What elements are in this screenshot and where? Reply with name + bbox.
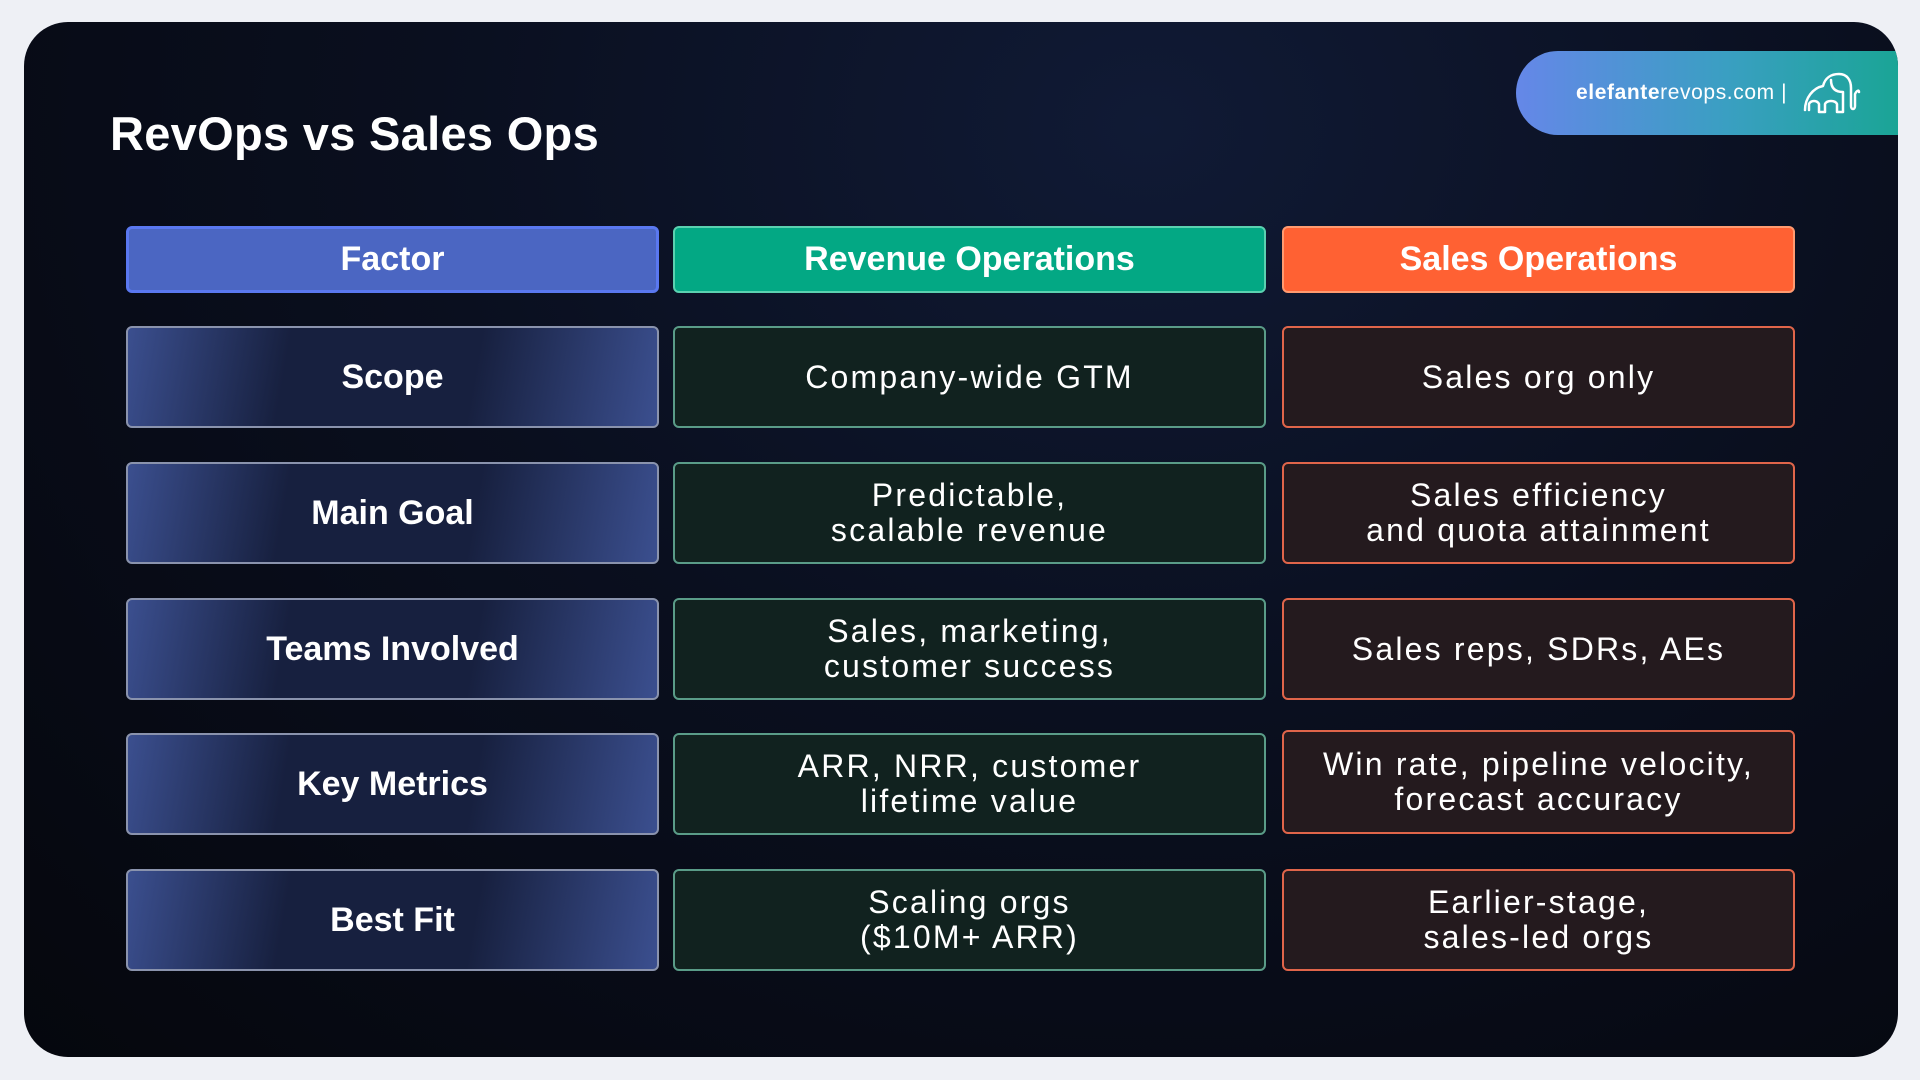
header: Revenue Operations: Revenue Operations <box>804 240 1135 278</box>
revops: scope <box>673 326 1266 428</box>
revops: teams: customer success <box>824 648 1115 684</box>
row: Key Metrics: Key Metrics <box>297 764 488 802</box>
salesops: metrics <box>1282 730 1795 834</box>
row: Key Metrics <box>126 733 659 835</box>
row: Teams Involved <box>126 598 659 700</box>
row: Teams Involved: Teams Involved <box>266 630 519 668</box>
revops: goal: scalable revenue <box>831 512 1108 548</box>
revops: metrics: ARR, NRR, customer <box>798 748 1141 784</box>
title: RevOps vs Sales Ops <box>110 107 599 160</box>
salesops: best fit <box>1282 869 1795 971</box>
salesops: teams <box>1282 598 1795 700</box>
salesops: best fit: Earlier-stage, <box>1428 884 1649 920</box>
salesops: goal: and quota attainment <box>1366 512 1711 548</box>
salesops: goal <box>1282 462 1795 564</box>
header: Sales Operations <box>1282 226 1795 293</box>
revops: metrics <box>673 733 1266 835</box>
logo pill <box>1516 51 1920 135</box>
icon: elephant <box>1804 72 1860 114</box>
row: Main Goal: Main Goal <box>311 494 474 532</box>
row: Main Goal <box>126 462 659 564</box>
revops: scope: Company-wide GTM <box>805 358 1134 394</box>
revops: best fit: ($10M+ ARR) <box>860 919 1079 955</box>
salesops: best fit: sales-led orgs <box>1423 919 1654 955</box>
row: Scope <box>126 326 659 428</box>
revops: teams: Sales, marketing, <box>827 613 1112 649</box>
revops: metrics: lifetime value <box>861 783 1078 819</box>
salesops: scope: Sales org only <box>1422 358 1655 394</box>
salesops: scope <box>1282 326 1795 428</box>
revops: goal <box>673 462 1266 564</box>
revops: best fit <box>673 869 1266 971</box>
revops: best fit: Scaling orgs <box>868 884 1071 920</box>
header: Sales Operations: Sales Operations <box>1400 240 1677 278</box>
row: Scope: Scope <box>341 358 444 396</box>
salesops: metrics: forecast accuracy <box>1394 781 1683 817</box>
revops: goal: Predictable, <box>872 477 1067 513</box>
salesops: goal: Sales efficiency <box>1410 477 1667 513</box>
header: Factor: Factor <box>341 240 444 278</box>
salesops: metrics: Win rate, pipeline velocity, <box>1323 746 1754 782</box>
salesops: teams: Sales reps, SDRs, AEs <box>1352 630 1725 666</box>
header: Factor <box>126 226 659 293</box>
revops: teams <box>673 598 1266 700</box>
row: Best Fit <box>126 869 659 971</box>
header: Revenue Operations <box>673 226 1266 293</box>
logo pill: elefanterevops.com | <box>1576 81 1787 104</box>
row: Best Fit: Best Fit <box>330 900 455 938</box>
